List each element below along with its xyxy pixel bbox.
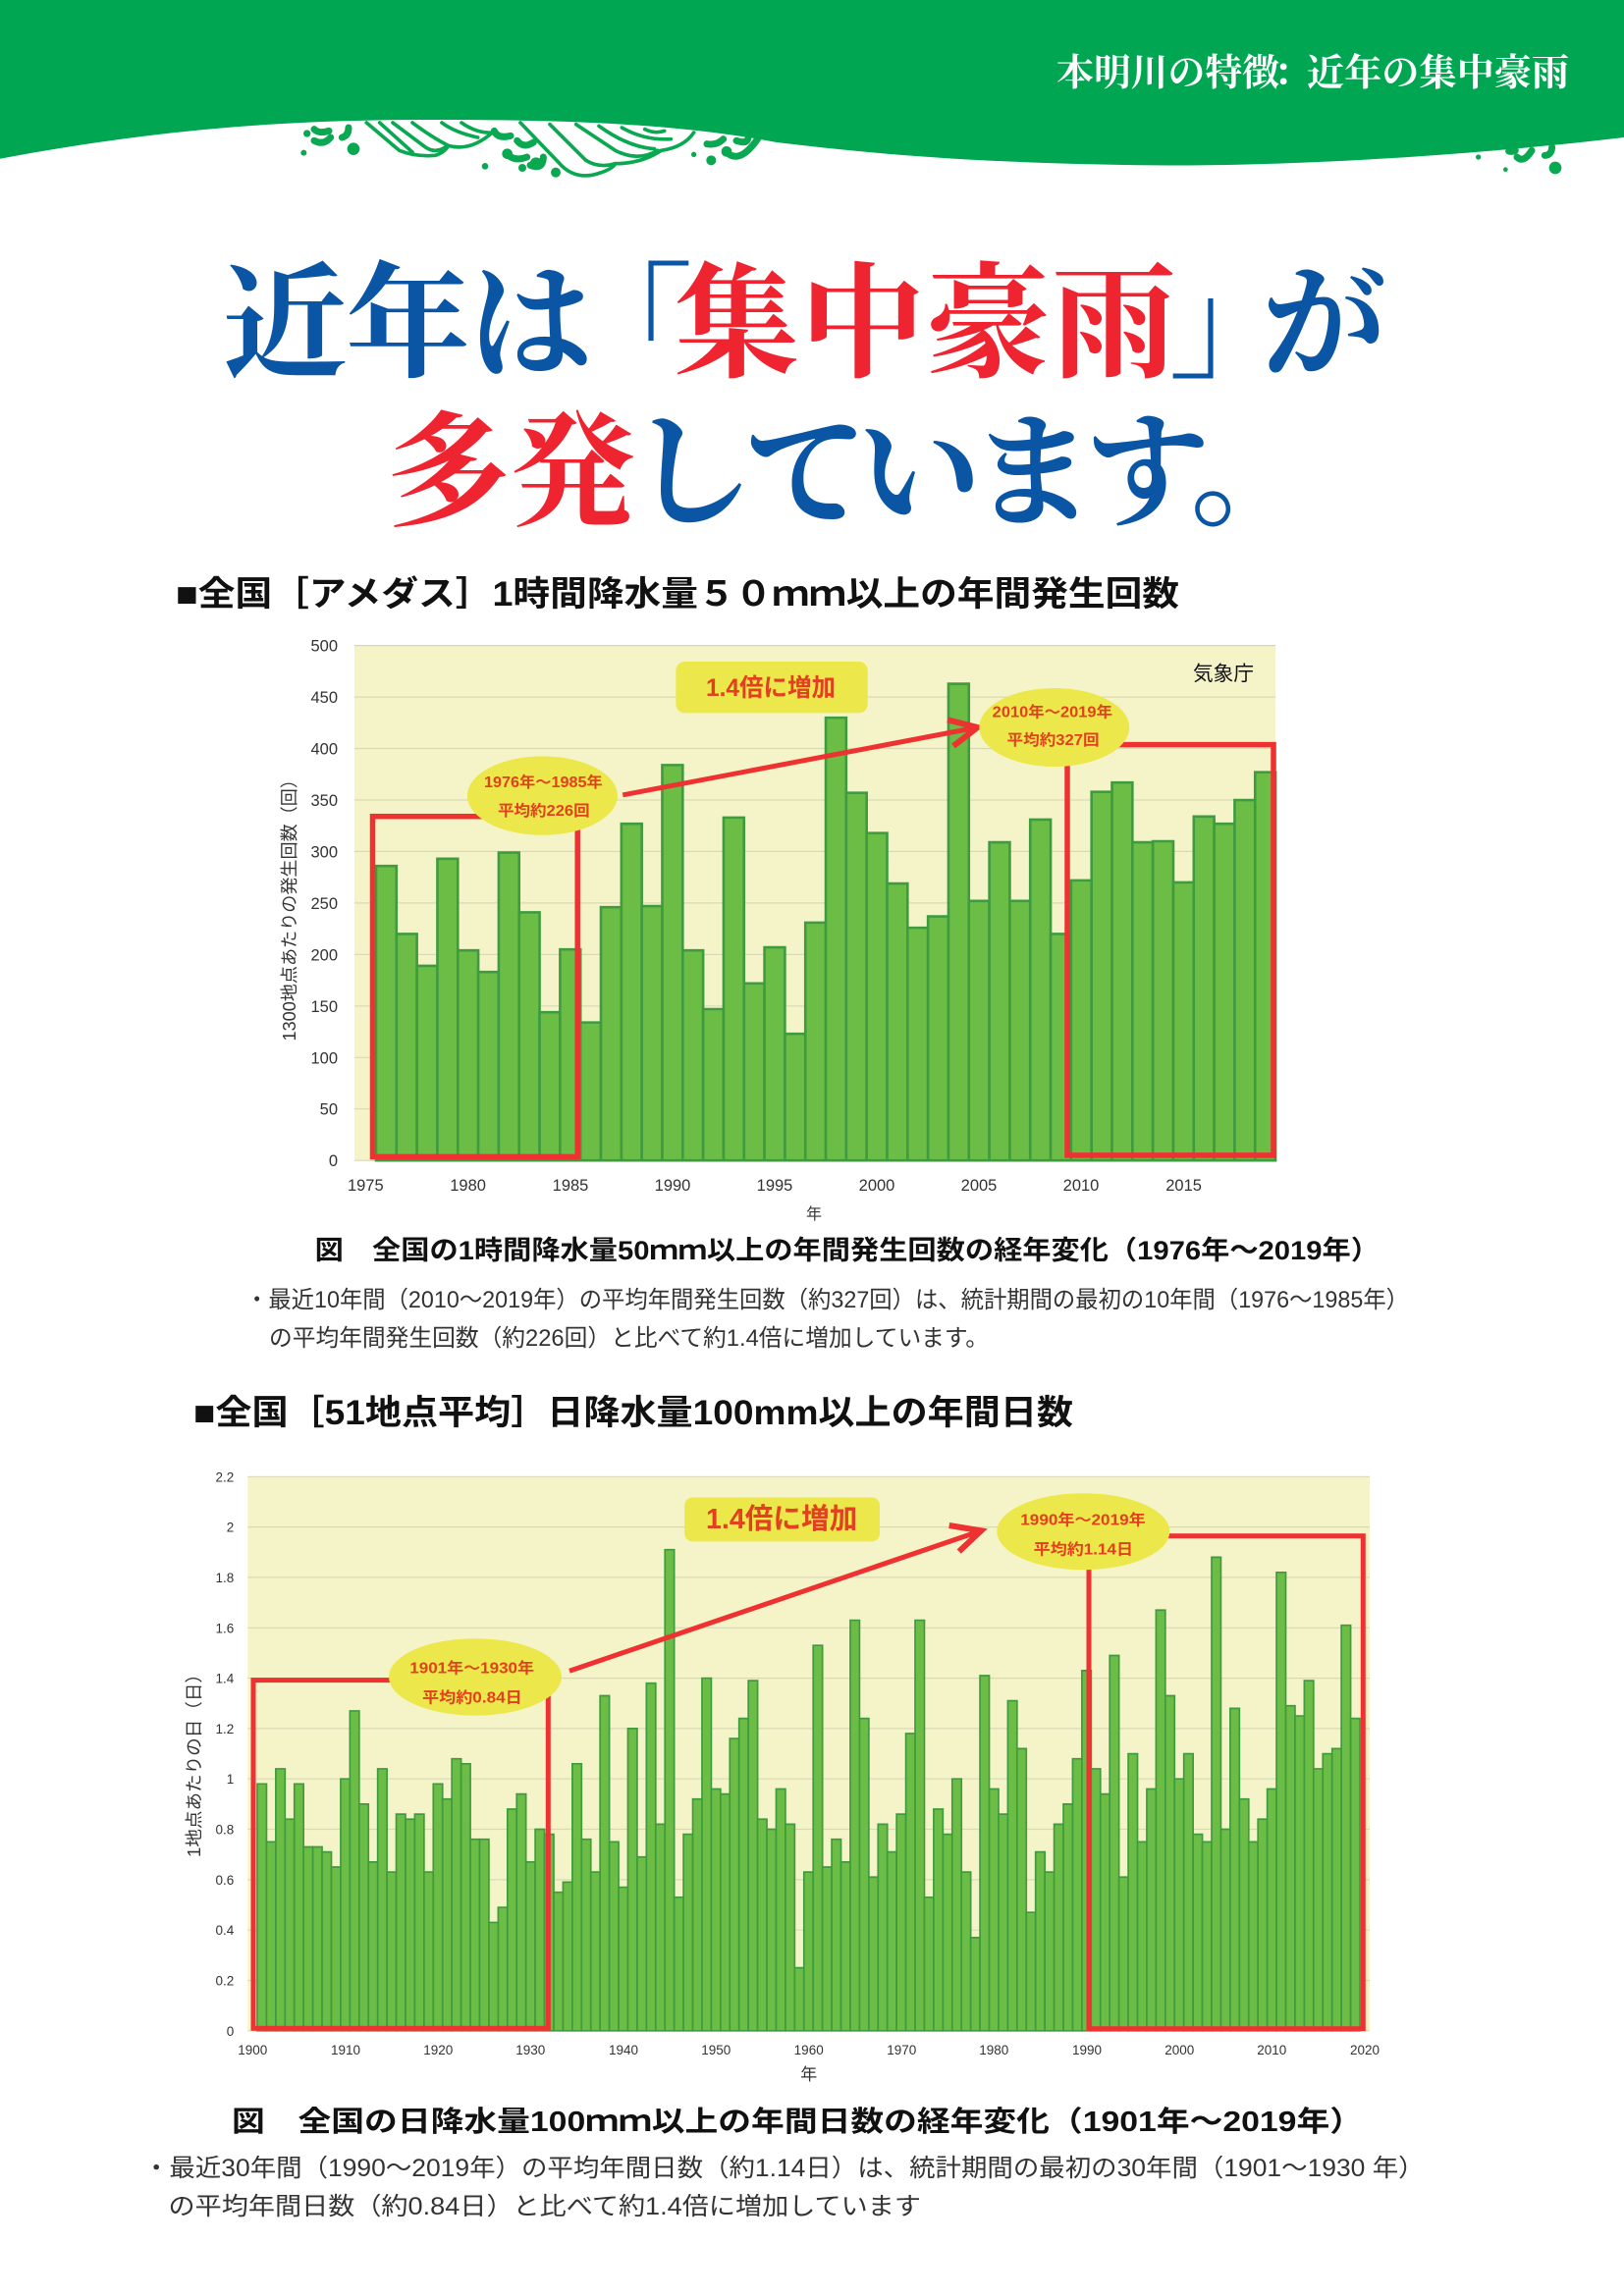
chart 1 description: ・最近10年間（2010～2019年）の平均年間発生回数（約327回）は、統計期間の最初の10年間（1976～1985年）: [245, 1287, 1409, 1313]
y axis labels: 350: [310, 792, 338, 810]
chart 2 description: の平均年間日数（約0.84日）と比べて約1.4倍に増加しています: [169, 2193, 921, 2220]
callout: 1901-1930 average: 1901年～1930年: [409, 1659, 534, 1677]
y axis labels: 0: [227, 2024, 234, 2039]
x axis labels: 1930: [515, 2043, 545, 2057]
callout: 1976-1985 average: 平均約226回: [498, 802, 590, 820]
source note: 気象庁: [1193, 663, 1254, 685]
y axis labels: 450: [310, 689, 338, 707]
y axis labels: 1.6: [216, 1621, 234, 1635]
x axis labels: 1990: [655, 1177, 690, 1195]
chart 2 description: ・最近30年間（1990～2019年）の平均年間日数（約1.14日）は、統計期間の最初の30年間（1901～1930 年）: [143, 2155, 1425, 2182]
x axis labels: 1970: [887, 2043, 916, 2057]
y axis labels: 200: [310, 946, 338, 964]
main title: 近年は「: [223, 257, 692, 395]
callout: 2010-2019 average: 平均約327回: [1007, 731, 1100, 749]
y axis labels: 500: [310, 638, 338, 656]
callout: 1976-1985 average: 1976年～1985年: [484, 773, 603, 791]
callout: 1990-2019 average: 1990年～2019年: [1020, 1510, 1146, 1529]
y axis labels: 1: [227, 1772, 234, 1787]
y axis labels: 0.4: [216, 1923, 235, 1938]
callout pill: 1.4x increase: 1.4倍に増加: [706, 1503, 857, 1535]
x axis labels: 2000: [1164, 2043, 1194, 2057]
section heading 2: ■全国［51地点平均］日降水量100mm以上の年間日数: [193, 1394, 1073, 1432]
red box: first 30 years: [253, 1681, 548, 2028]
plot background: [354, 646, 1275, 1160]
main title: 」が: [1169, 257, 1386, 395]
x axis labels: 1910: [331, 2043, 360, 2057]
y axis labels: [310, 638, 338, 1170]
callout: 2010-2019 average: [979, 688, 1129, 767]
header label: ：: [1273, 53, 1311, 94]
y axis labels: 0: [329, 1152, 338, 1170]
header label: 本明川の特徴: [1056, 53, 1279, 94]
header label: [1056, 53, 1569, 94]
chart 2 caption: 図 全国の日降水量100ｍｍ以上の年間日数の経年変化（1901年～2019年）: [232, 2106, 1363, 2138]
x axis labels: 1920: [423, 2043, 453, 2057]
plot background: [247, 1476, 1370, 2031]
red box: last 30 years: [1089, 1536, 1363, 2029]
x axis labels: 1950: [701, 2043, 731, 2057]
callout: 1990-2019 average: 平均約1.14日: [1034, 1541, 1133, 1559]
main title: 多発: [387, 406, 635, 544]
y axis labels: 150: [310, 998, 338, 1016]
main title: しています。: [629, 406, 1315, 544]
decorative wave pattern under header: [300, 123, 1561, 178]
x axis labels: 1980: [450, 1177, 486, 1195]
header label: 近年の集中豪雨: [1307, 53, 1569, 94]
x axis labels: 1990: [1072, 2043, 1102, 2057]
callout: 2010-2019 average: 2010年～2019年: [993, 703, 1112, 721]
y axis labels: 100: [310, 1049, 338, 1067]
x axis title: 年: [806, 1205, 822, 1223]
chart 2: annual days with 100mm daily rain: [185, 1469, 1380, 2084]
y axis labels: 50: [320, 1101, 338, 1119]
callout: 1901-1930 average: [389, 1638, 562, 1716]
y axis labels: 1.4: [216, 1672, 235, 1686]
y axis labels: 0.2: [216, 1973, 234, 1989]
main title: [223, 257, 1386, 544]
bars 1901-2019: [257, 1550, 1360, 2031]
green header band: [0, 0, 1624, 165]
chart 2 description: [143, 2155, 1425, 2220]
x axis labels: 2015: [1165, 1177, 1202, 1195]
red box: last decade: [1067, 745, 1273, 1155]
main title: 集中豪雨: [675, 257, 1176, 395]
x axis labels: 1995: [757, 1177, 792, 1195]
x axis labels: 1980: [979, 2043, 1008, 2057]
x axis labels: 2010: [1257, 2043, 1286, 2057]
bars 1976-2019: [376, 684, 1275, 1160]
y axis labels: 1.2: [216, 1722, 234, 1736]
arrow: increase: [569, 1525, 981, 1671]
x axis labels: 2020: [1350, 2043, 1380, 2057]
x axis labels: 2010: [1063, 1177, 1099, 1195]
y axis labels: 1.8: [216, 1571, 234, 1585]
callout pill: 1.4x increase: [676, 662, 868, 713]
x axis labels: 2005: [961, 1177, 997, 1195]
callout pill: 1.4x increase: 1.4倍に増加: [706, 674, 836, 702]
y axis title: 1300地点あたりの発生回数（回）: [280, 771, 299, 1041]
x axis labels: 2000: [859, 1177, 894, 1195]
chart 1 caption: 図 全国の1時間降水量50ｍｍ以上の年間発生回数の経年変化（1976年～2019年）: [315, 1236, 1380, 1265]
chart 1: annual occurrences of 50mm/h rain: [280, 638, 1275, 1223]
callout pill: 1.4x increase: [684, 1498, 880, 1541]
x axis labels: 1960: [794, 2043, 824, 2057]
callout: 1990-2019 average: [997, 1493, 1169, 1570]
arrow: increase: [623, 720, 978, 795]
x axis labels: 1985: [553, 1177, 588, 1195]
y axis labels: 250: [310, 895, 338, 913]
section heading 1: ■全国［アメダス］1時間降水量５０ｍｍ以上の年間発生回数: [176, 574, 1179, 614]
y axis labels: 2: [227, 1521, 234, 1535]
y axis labels: 0.8: [216, 1822, 234, 1838]
y axis labels: 400: [310, 740, 338, 758]
y axis title: 1地点あたりの日（日）: [185, 1665, 204, 1857]
chart 1 description: の平均年間発生回数（約226回）と比べて約1.4倍に増加しています。: [269, 1325, 989, 1352]
callout: 1901-1930 average: 平均約0.84日: [422, 1688, 522, 1706]
x axis title: 年: [800, 2065, 817, 2084]
y axis labels: [216, 1469, 235, 2039]
y axis labels: 2.2: [216, 1469, 234, 1484]
x axis labels: [238, 2043, 1380, 2057]
x axis labels: 1900: [238, 2043, 267, 2057]
red box: first decade: [373, 817, 577, 1156]
callout: 1976-1985 average: [467, 756, 618, 835]
x axis labels: [348, 1177, 1202, 1195]
x axis labels: 1975: [348, 1177, 384, 1195]
x axis labels: 1940: [609, 2043, 638, 2057]
chart 1 description: [245, 1287, 1409, 1352]
y axis labels: 300: [310, 843, 338, 861]
y axis labels: 0.6: [216, 1873, 234, 1888]
